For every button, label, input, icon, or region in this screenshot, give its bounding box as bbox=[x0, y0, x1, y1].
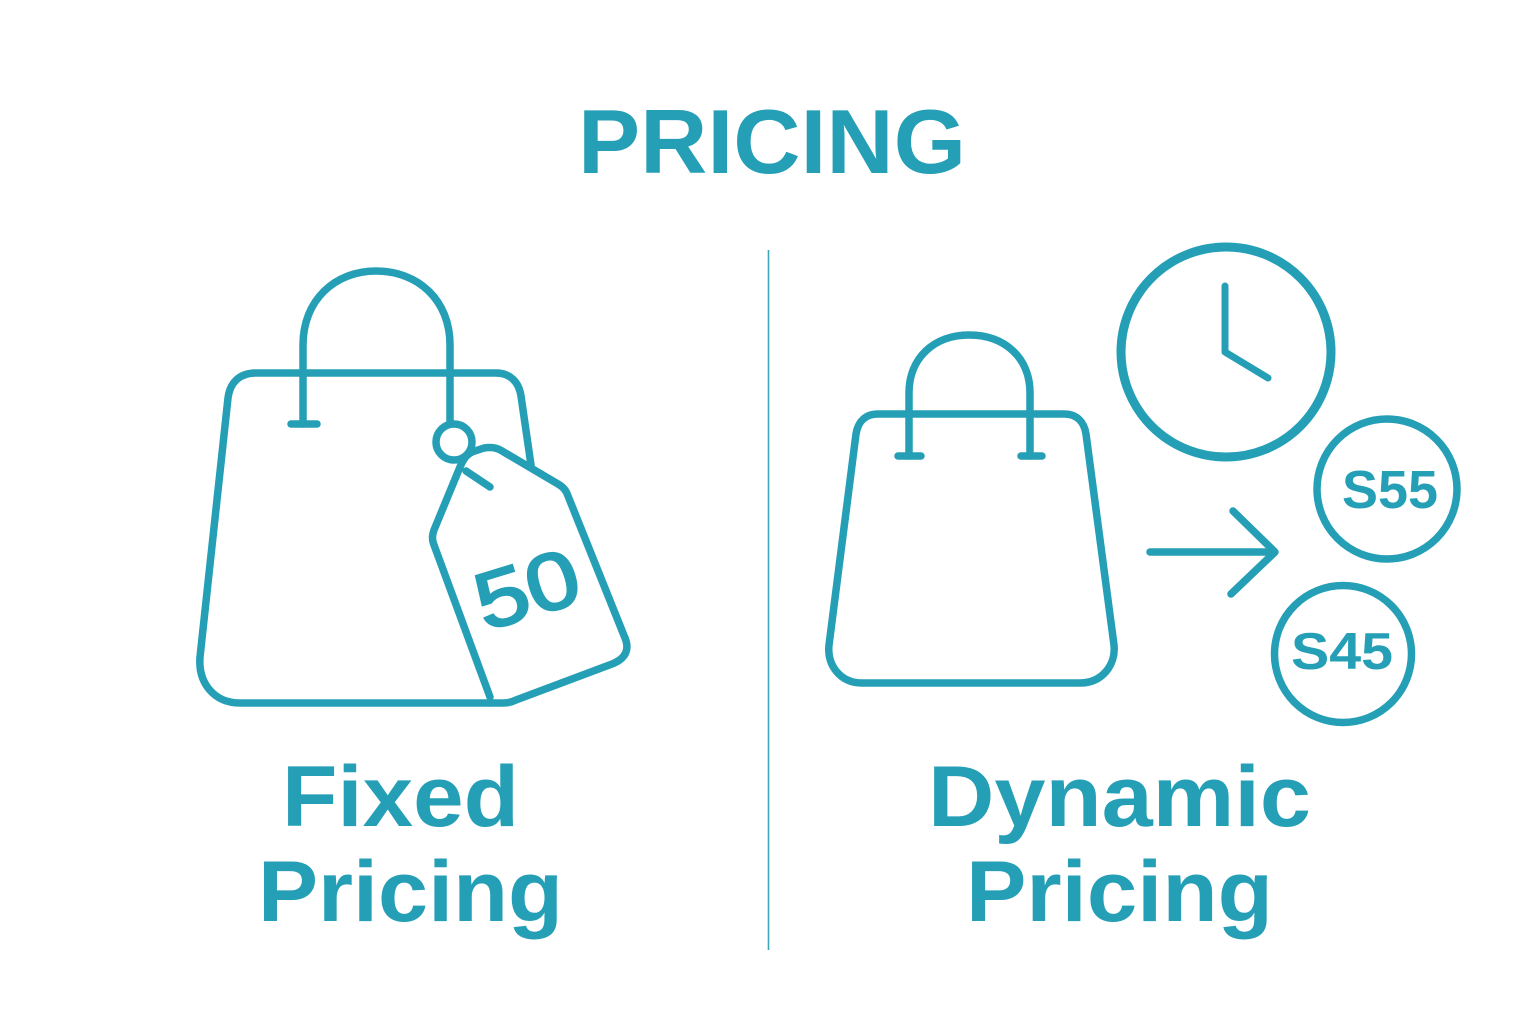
icon: shopping bag with handle bbox=[200, 271, 531, 703]
icon: shopping bag bbox=[829, 335, 1114, 683]
label: dynamic pricing: Dynamic bbox=[928, 749, 1311, 845]
price circle: S45 bbox=[1274, 586, 1412, 722]
label: fixed pricing: Pricing bbox=[258, 844, 563, 940]
price circle: S45: S45 bbox=[1291, 623, 1393, 681]
label: dynamic pricing: Pricing bbox=[966, 844, 1273, 940]
price circle: S55 bbox=[1317, 419, 1457, 559]
title: PRICING bbox=[578, 92, 966, 193]
price circle: S55: S55 bbox=[1342, 460, 1438, 520]
icon: clock bbox=[1121, 247, 1331, 457]
arrow bbox=[1150, 511, 1275, 594]
tag price: 50 bbox=[464, 531, 590, 648]
label: fixed pricing bbox=[258, 749, 563, 940]
label: fixed pricing: Fixed bbox=[282, 749, 519, 845]
panel: dynamic pricing bbox=[829, 247, 1457, 940]
label: dynamic pricing bbox=[928, 749, 1311, 940]
divider bbox=[768, 250, 770, 950]
icon: price tag bbox=[432, 424, 627, 703]
panel: fixed pricing bbox=[200, 271, 627, 940]
